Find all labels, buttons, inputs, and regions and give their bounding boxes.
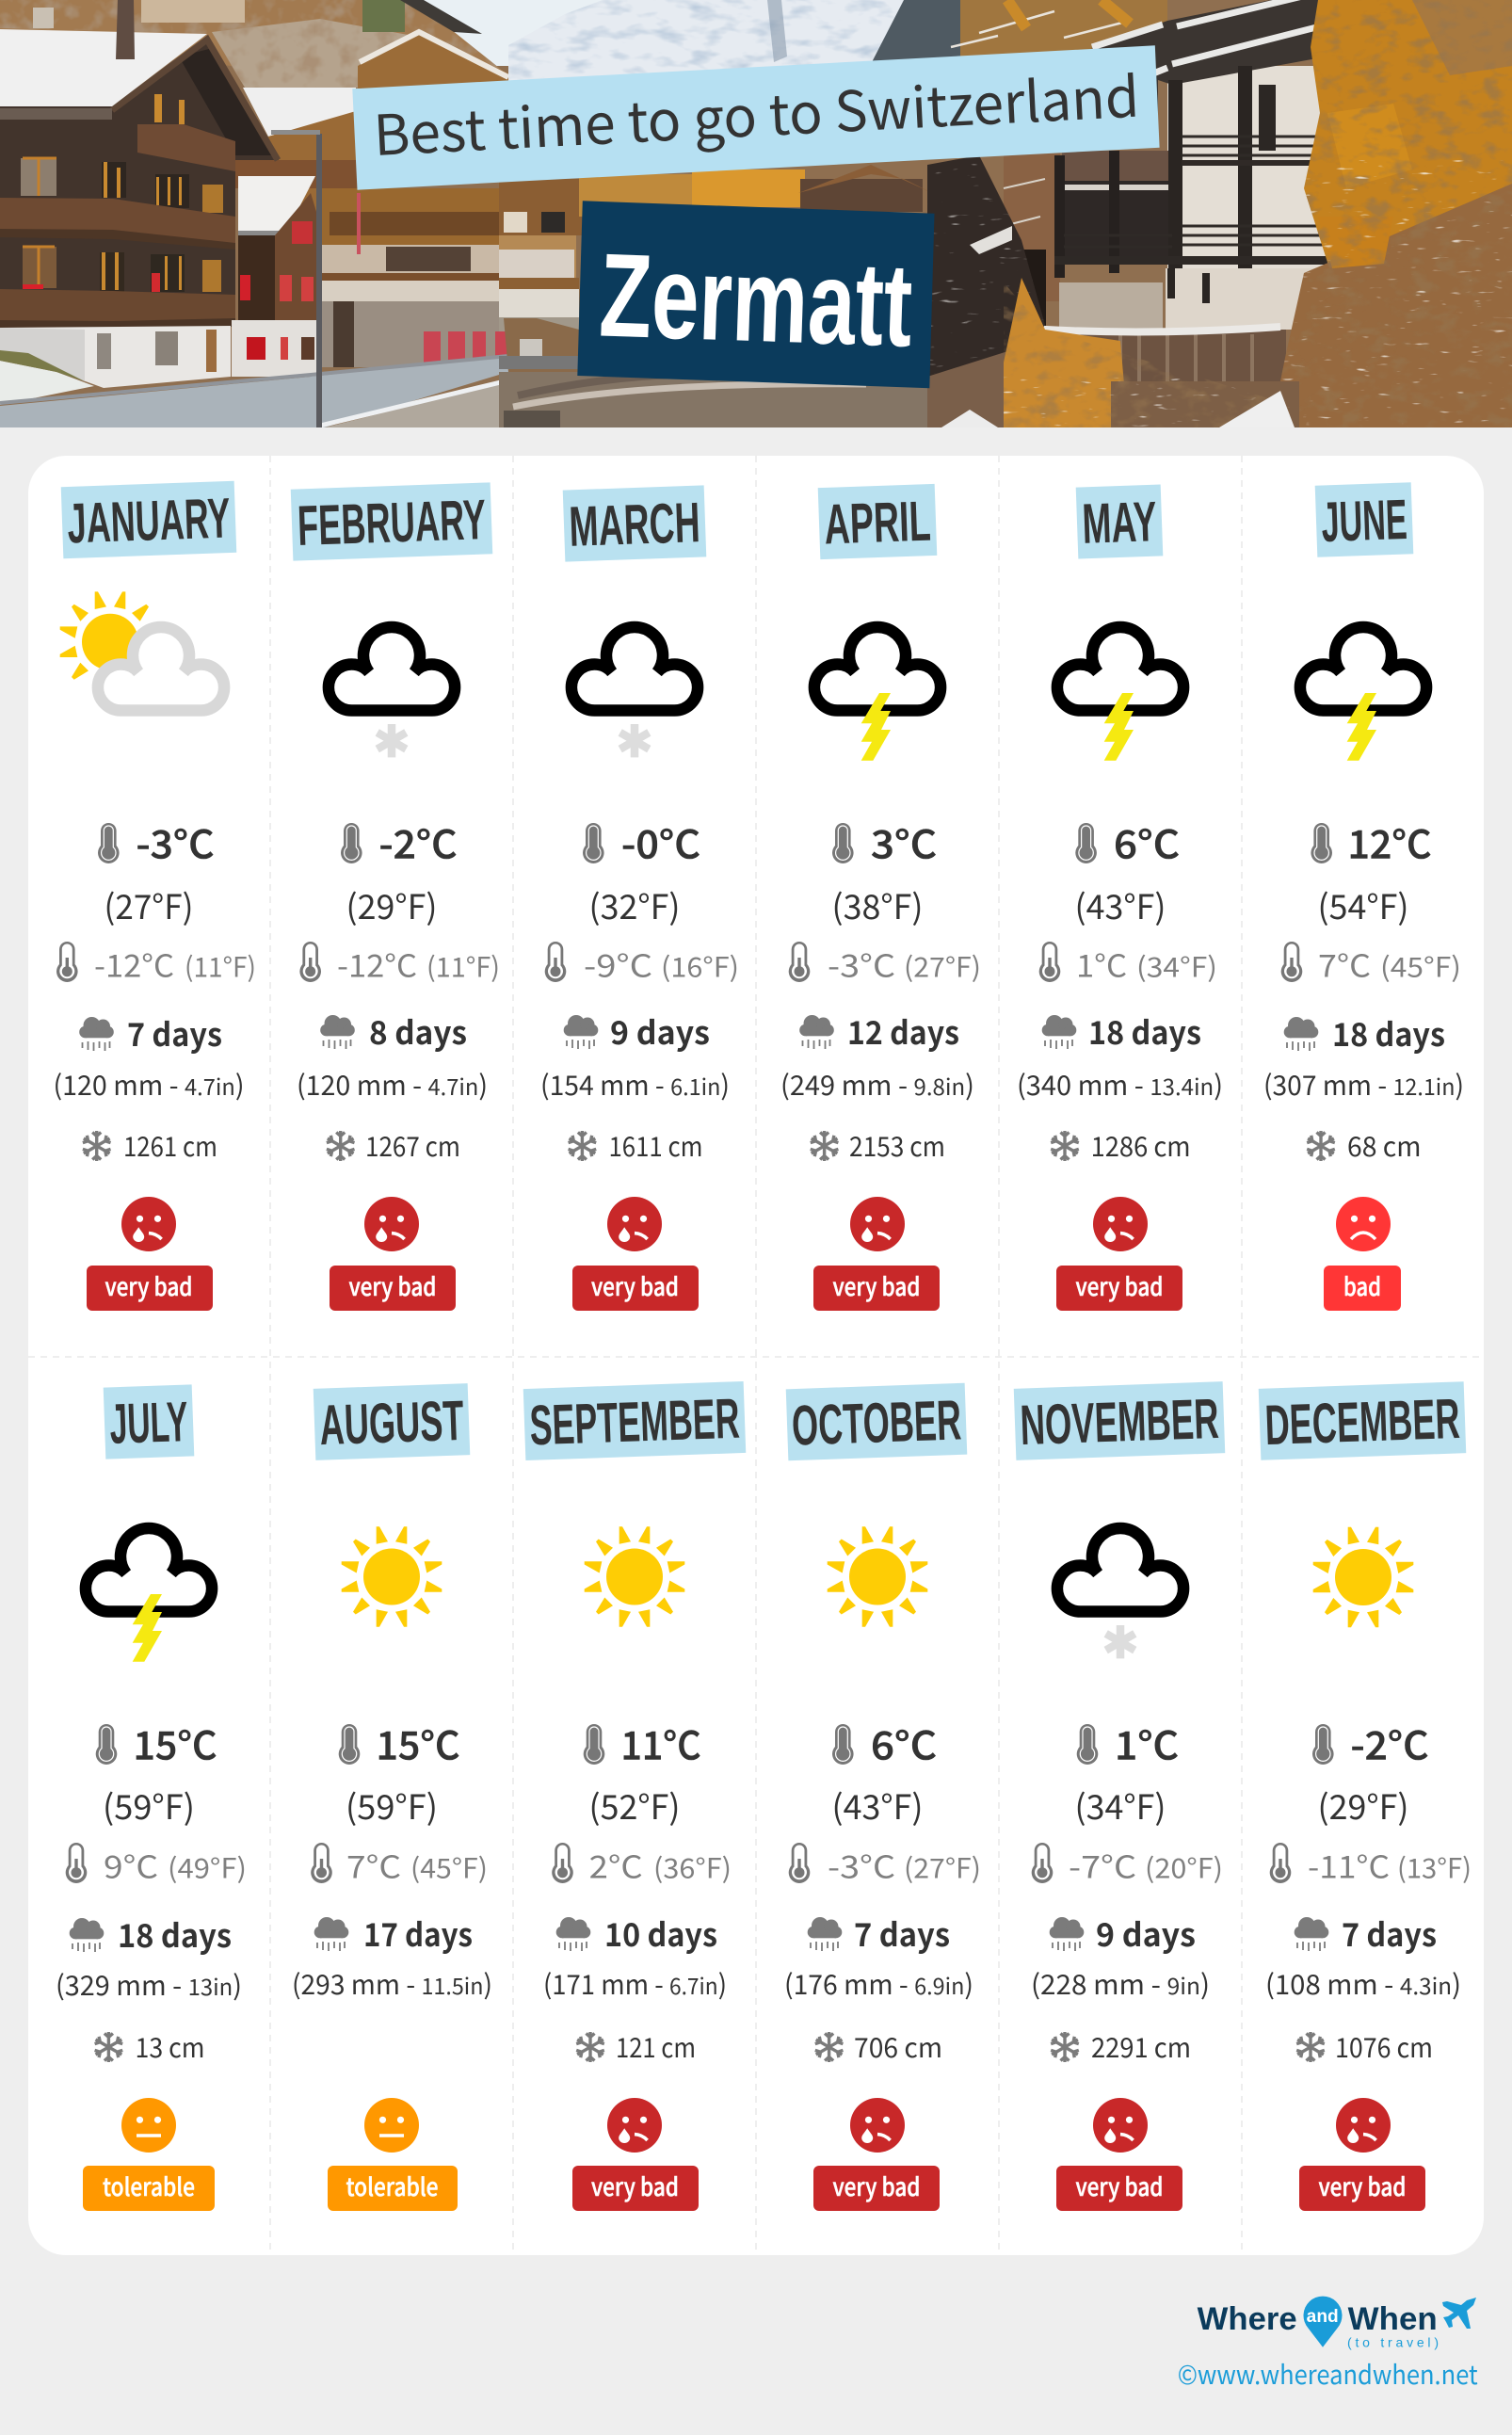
month label [104,1384,194,1459]
logo: Where and When (to travel) [1198,2297,1476,2349]
minimum temperature: (20°F) [1145,1847,1223,1887]
snowfall [813,2027,942,2066]
rain days: 18 days [118,1911,232,1957]
rainfall amount: (329 mm - 13in) [56,1964,242,2004]
month label: JANUARY [66,487,232,555]
minimum temperature: 7°C [1318,942,1371,987]
rain days: 9 days [1096,1910,1196,1956]
rating badge [1056,2166,1182,2211]
minimum temperature [1270,1842,1472,1887]
minimum temperature: (45°F) [410,1847,488,1887]
column: July [56,1384,247,2211]
destination banner [577,201,934,388]
rain days: 9 days [610,1008,710,1054]
rain days [1042,1008,1201,1054]
rating badge: very bad [348,1268,437,1303]
average temperature: 6°C [871,1715,937,1771]
average temperature: -2°C [378,814,458,870]
rain days [556,1910,717,1956]
snowfall [809,1126,945,1165]
minimum temperature: -3°C [828,1842,895,1887]
month label [61,481,236,558]
snowfall: 1267 cm [365,1126,460,1165]
average temperature [1312,1715,1429,1771]
rating badge: very bad [105,1268,192,1303]
minimum temperature: -11°C [1308,1842,1390,1887]
minimum temperature [311,1842,488,1887]
icon: crying face [364,1197,419,1251]
icon: sun [585,1526,684,1627]
icon: crying face [607,1197,662,1251]
minimum temperature: (34°F) [1136,945,1217,985]
rainfall amount: (154 mm - 6.1in) [540,1064,730,1104]
column: May [1017,484,1223,1311]
icon: thunderstorm cloud [1057,627,1183,761]
minimum temperature: 7°C [346,1842,401,1887]
average temperature: 3°C [871,814,937,870]
average temperature [584,1715,700,1771]
column: April [780,484,981,1311]
column: September [523,1381,746,2211]
rain days: 7 days [127,1009,222,1056]
month label [818,484,937,559]
minimum temperature: 1°C [1076,942,1127,987]
river and stone wall under the banner [499,372,941,428]
average temperature: 6°C [1114,814,1180,870]
average temperature [341,814,458,870]
month label [523,1381,746,1460]
snowfall: 706 cm [854,2027,942,2066]
destination name: Zermatt [598,228,914,372]
average temperature [583,814,700,870]
snowfall [1295,2027,1433,2066]
average temperature [832,814,937,870]
icon: crying face [121,1197,176,1251]
icon: neutral face [121,2098,176,2153]
snowfall: 68 cm [1347,1126,1422,1165]
header photo: Zermatt chalets in winter [0,0,1512,428]
rainfall amount: (307 mm - 12.1in) [1263,1064,1464,1104]
minimum temperature: -7°C [1069,1842,1136,1887]
orange larch trees and brush [1304,0,1512,278]
snowfall: 1286 cm [1091,1126,1191,1165]
average temperature [1311,814,1431,870]
column: June [1263,482,1464,1311]
minimum temperature [1039,942,1217,987]
average temperature: 15°C [134,1715,217,1771]
minimum temperature [552,1842,732,1887]
rainfall amount: (340 mm - 13.4in) [1017,1064,1223,1104]
snowfall [575,2027,696,2066]
minimum temperature: (27°F) [904,1847,981,1887]
icon: map pin [1303,2297,1342,2347]
column: March [540,485,739,1311]
column: October [784,1383,981,2211]
minimum temperature [56,942,256,987]
logo: Where and When (to travel): (to travel) [1347,2334,1439,2349]
small red-shuttered chalet [238,176,315,231]
rain days [70,1911,232,1957]
temperature in Fahrenheit: (27°F) [104,880,194,929]
average temperature [339,1715,459,1771]
rain days: 8 days [369,1008,467,1054]
minimum temperature: (45°F) [1380,945,1461,985]
month label [1014,1381,1225,1460]
rainfall amount: (176 mm - 6.9in) [784,1963,973,2003]
month label: JULY [108,1390,189,1456]
minimum temperature: 2°C [589,1842,643,1887]
rainfall amount: (120 mm - 4.7in) [53,1064,245,1104]
icon: neutral face [364,2098,419,2153]
icon: thunderstorm cloud [1300,627,1426,761]
rating badge: very bad [1318,2169,1407,2203]
average temperature: -0°C [621,814,700,870]
column: January [53,481,256,1311]
icon: thunderstorm cloud [814,627,941,761]
temperature in Fahrenheit: (54°F) [1318,880,1408,929]
temperature in Fahrenheit: (32°F) [589,880,680,929]
rating badge: very bad [1075,2169,1164,2203]
rain days [320,1008,467,1054]
minimum temperature: (11°F) [185,945,256,985]
icon: cloud with snow [571,627,698,757]
minimum temperature [789,1842,981,1887]
temperature in Fahrenheit: (43°F) [832,1781,923,1830]
rain days: 10 days [604,1910,717,1956]
rating badge: very bad [832,2169,921,2203]
rain days: 18 days [1332,1009,1445,1056]
snowfall [1050,2027,1191,2066]
month label: MARCH [568,491,701,558]
column: November [1014,1381,1225,2211]
minimum temperature: (16°F) [661,945,739,985]
middle buildings [320,188,508,245]
month label [1315,482,1413,557]
average temperature: 1°C [1115,1715,1179,1771]
month label: APRIL [823,490,932,556]
logo: Where and When (to travel): Where [1198,2301,1297,2337]
minimum temperature: -9°C [584,942,652,987]
minimum temperature [66,1842,247,1887]
icon: crying face [607,2098,662,2153]
rating badge: very bad [1075,1268,1164,1303]
rain days [1284,1009,1445,1056]
month label: NOVEMBER [1019,1387,1220,1457]
snowfall [1050,1126,1191,1165]
icon: crying face [1336,2098,1391,2153]
temperature in Fahrenheit: (59°F) [346,1781,438,1830]
temperature in Fahrenheit: (59°F) [103,1781,195,1830]
average temperature: -3°C [136,814,215,870]
average temperature: 12°C [1348,814,1431,870]
minimum temperature: 9°C [104,1842,158,1887]
rating badge: bad [1343,1268,1381,1303]
rain days [808,1910,950,1956]
snowfall: 13 cm [136,2027,205,2066]
average temperature [1077,1715,1179,1771]
minimum temperature: (36°F) [653,1847,732,1887]
temperature in Fahrenheit: (29°F) [1318,1781,1408,1830]
rainfall amount: (171 mm - 6.7in) [543,1963,727,2003]
snowfall: 2153 cm [849,1126,945,1165]
minimum temperature [299,942,500,987]
title text: Best time to go to Switzerland [372,53,1141,171]
rain days [1050,1910,1196,1956]
temperature in Fahrenheit: (43°F) [1075,880,1166,929]
icon: crying face [850,1197,905,1251]
minimum temperature: -12°C [337,942,417,987]
rating badge [87,1266,213,1311]
minimum temperature [1281,942,1461,987]
minimum temperature: (27°F) [904,945,981,985]
average temperature [1075,814,1180,870]
temperature in Fahrenheit: (38°F) [832,880,923,929]
icon: sun and grey cloud [60,591,224,710]
month label: FEBRUARY [297,488,487,557]
snowfall [82,1126,217,1165]
month label [1076,484,1163,559]
rain days: 18 days [1088,1008,1201,1054]
icon: sun [1313,1527,1413,1627]
rating badge [1056,1266,1182,1311]
month label [563,485,706,562]
minimum temperature: -3°C [828,942,895,987]
snowfall: 1076 cm [1335,2027,1433,2066]
rain days: 7 days [1342,1910,1437,1956]
rating badge: very bad [591,2169,679,2203]
average temperature: 11°C [621,1715,700,1771]
title banner [352,45,1160,190]
rain days [314,1910,473,1956]
icon: cloud with snow [1057,1528,1183,1658]
rating badge: very bad [591,1268,679,1303]
month label: MAY [1081,490,1158,556]
column: December [1259,1381,1472,2211]
icon: cloud with snow [329,627,455,757]
snowfall [326,1126,460,1165]
rating badge [813,1266,940,1311]
rain days: 7 days [854,1910,950,1956]
rating badge [1299,2166,1425,2211]
icon: thunderstorm cloud [86,1528,212,1662]
column: August [292,1383,492,2211]
snowfall: 1611 cm [608,1126,702,1165]
month label [314,1383,470,1460]
rating badge [572,2166,699,2211]
panel: monthly weather table [28,456,1484,2255]
icon: sun [342,1526,442,1627]
minimum temperature: (49°F) [168,1847,247,1887]
temperature in Fahrenheit: (29°F) [346,880,437,929]
minimum temperature: -12°C [94,942,174,987]
snowfall: 121 cm [616,2027,696,2066]
minimum temperature [545,942,739,987]
rain days [799,1008,959,1054]
rainfall amount: (249 mm - 9.8in) [780,1064,974,1104]
rain days [79,1009,222,1056]
buildings between the banners [499,179,584,235]
rating badge [83,2166,215,2211]
rating badge [813,2166,940,2211]
temperature in Fahrenheit: (52°F) [589,1781,680,1830]
minimum temperature: (11°F) [426,945,500,985]
rating badge [1324,1266,1401,1311]
left chalet [243,88,356,137]
average temperature [832,1715,937,1771]
average temperature: 15°C [377,1715,459,1771]
snowfall [93,2027,205,2066]
icon: crying face [1093,1197,1148,1251]
rain days: 12 days [847,1008,959,1054]
column: February [291,482,500,1311]
icon: sun [828,1526,927,1627]
rating badge [328,2166,458,2211]
logo: Where and When (to travel): and [1307,2307,1339,2327]
right dark balcony chalet [1004,141,1060,301]
month label: OCTOBER [791,1388,962,1458]
average temperature [96,1715,217,1771]
minimum temperature [1032,1842,1223,1887]
dark fir tree [927,155,1045,386]
month label: SEPTEMBER [528,1387,741,1457]
month label: JUNE [1320,488,1408,554]
rainfall amount: (120 mm - 4.7in) [297,1064,488,1104]
snowfall [1306,1126,1422,1165]
rating badge: very bad [832,1268,921,1303]
month label [291,482,492,561]
minimum temperature [789,942,981,987]
rain days [1295,1910,1437,1956]
rating badge [572,1266,699,1311]
icon: crying face [850,2098,905,2153]
fence and wall [0,356,508,427]
website credit: ©www.whereandwhen.net [1178,2355,1478,2393]
temperature in Fahrenheit: (34°F) [1075,1781,1166,1830]
icon: sad face [1336,1197,1391,1251]
rating badge: tolerable [346,2169,439,2203]
average temperature: -2°C [1350,1715,1429,1771]
month label [786,1383,967,1460]
rainfall amount: (293 mm - 11.5in) [292,1963,492,2003]
rating badge: tolerable [103,2169,195,2203]
snowfall: 1261 cm [123,1126,217,1165]
icon: airplane [1442,2298,1476,2329]
rainfall amount: (108 mm - 4.3in) [1265,1963,1461,2003]
snowfall: 2291 cm [1091,2027,1191,2066]
minimum temperature: (13°F) [1397,1847,1472,1887]
rainfall amount: (228 mm - 9in) [1031,1963,1210,2003]
rating badge [330,1266,456,1311]
snowfall [567,1126,702,1165]
rain days: 17 days [363,1910,473,1956]
month label: AUGUST [318,1389,465,1457]
logo: Where and When (to travel): When [1348,2301,1438,2337]
rain days [564,1008,710,1054]
icon: crying face [1093,2098,1148,2153]
average temperature [98,814,215,870]
